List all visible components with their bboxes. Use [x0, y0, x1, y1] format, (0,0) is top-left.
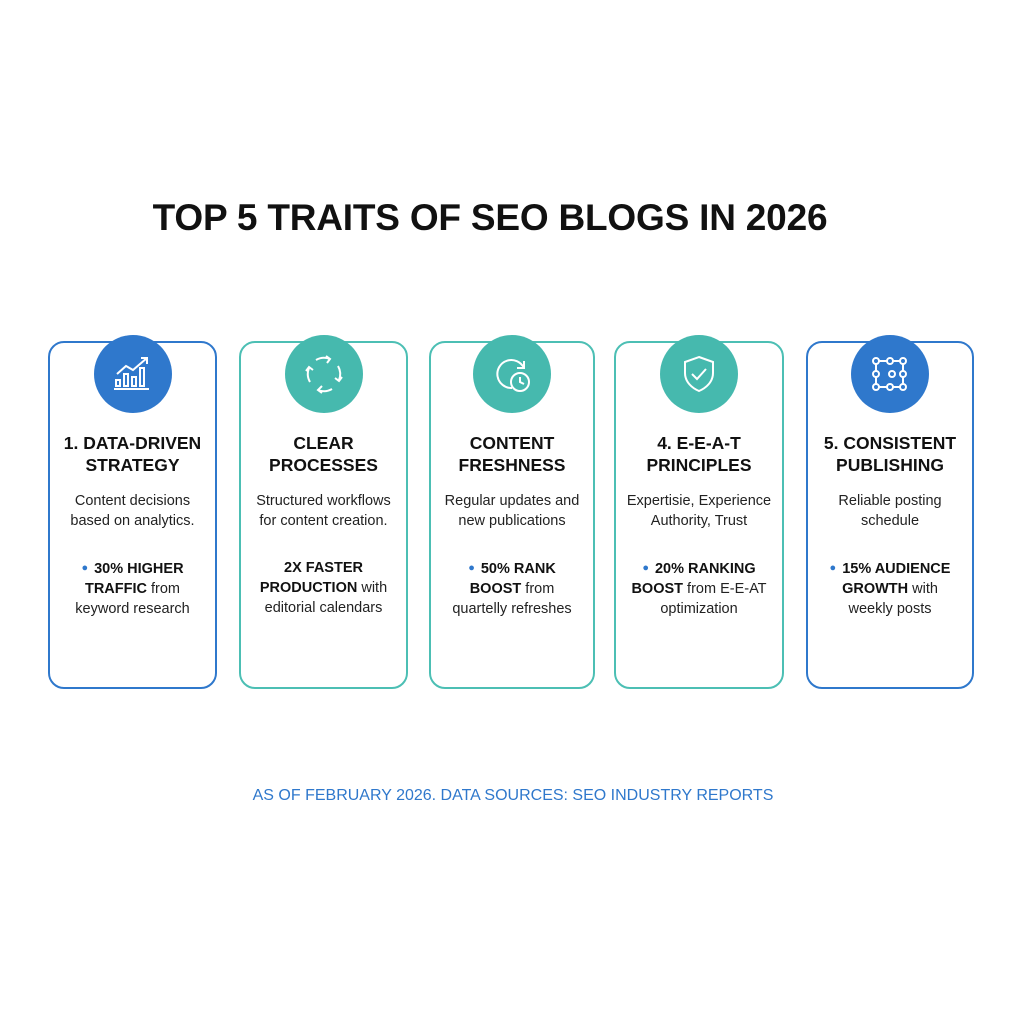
stat	[830, 561, 950, 617]
description: for content creation.	[259, 513, 388, 529]
heading: CLEAR	[293, 433, 354, 453]
heading: FRESHNESS	[459, 455, 565, 475]
icon: refresh clock	[473, 335, 551, 413]
heading: PROCESSES	[269, 455, 378, 475]
icon: node schedule	[851, 335, 929, 413]
heading: 1. DATA-DRIVEN	[64, 433, 201, 453]
stat: 2X FASTER	[284, 560, 363, 576]
title: TOP 5 TRAITS OF SEO BLOGS IN 2026	[153, 197, 827, 238]
panel: clear processes	[239, 341, 408, 689]
description: new publications	[458, 513, 566, 529]
description: Regular updates and	[445, 493, 579, 509]
stat	[75, 561, 190, 617]
heading: STRATEGY	[86, 455, 180, 475]
heading	[269, 433, 378, 475]
panel: data-driven strategy	[48, 341, 217, 689]
stat: ● 15% AUDIENCE	[830, 561, 950, 577]
description: Expertisie, Experience	[627, 493, 771, 509]
stat: keyword research	[75, 601, 190, 617]
icon: growth chart	[94, 335, 172, 413]
stat: ● 20% RANKING	[642, 561, 756, 577]
description: Content decisions	[75, 493, 190, 509]
heading	[646, 433, 752, 475]
heading: PRINCIPLES	[646, 455, 752, 475]
stat: BOOST from E-E-AT	[631, 581, 767, 597]
description	[838, 493, 942, 529]
panel: consistent publishing	[806, 341, 974, 689]
heading: CONTENT	[470, 433, 554, 453]
stat: TRAFFIC from	[85, 581, 180, 597]
stat: PRODUCTION with	[260, 580, 387, 596]
description: Structured workflows	[256, 493, 391, 509]
stat	[631, 561, 767, 617]
stat: optimization	[660, 601, 738, 617]
stat: ● 50% RANK	[468, 561, 556, 577]
description: Reliable posting	[838, 493, 942, 509]
heading: PUBLISHING	[836, 455, 944, 475]
stat	[260, 560, 387, 616]
description	[256, 493, 391, 529]
description	[627, 493, 771, 529]
panel: content freshness	[429, 341, 595, 689]
description	[445, 493, 579, 529]
stat	[452, 561, 572, 617]
icon: shield check	[660, 335, 738, 413]
heading	[64, 433, 201, 475]
stat: GROWTH with	[842, 581, 938, 597]
description: Authority, Trust	[651, 513, 747, 529]
heading	[459, 433, 565, 475]
icon: cycle arrows	[284, 335, 362, 413]
stat: quartelly refreshes	[452, 601, 572, 617]
description: schedule	[861, 513, 919, 529]
stat: BOOST from	[470, 581, 554, 597]
stat: weekly posts	[848, 601, 932, 617]
heading: 5. CONSISTENT	[824, 433, 956, 453]
heading	[824, 433, 956, 475]
panel: E-E-A-T principles	[614, 341, 784, 689]
stat: ● 30% HIGHER	[81, 561, 184, 577]
heading: 4. E-E-A-T	[657, 433, 741, 453]
stat: editorial calendars	[265, 600, 382, 616]
description: based on analytics.	[70, 513, 195, 529]
footer source note: AS OF FEBRUARY 2026. DATA SOURCES: SEO INDUSTRY REPORTS	[253, 787, 773, 804]
description	[70, 493, 195, 529]
